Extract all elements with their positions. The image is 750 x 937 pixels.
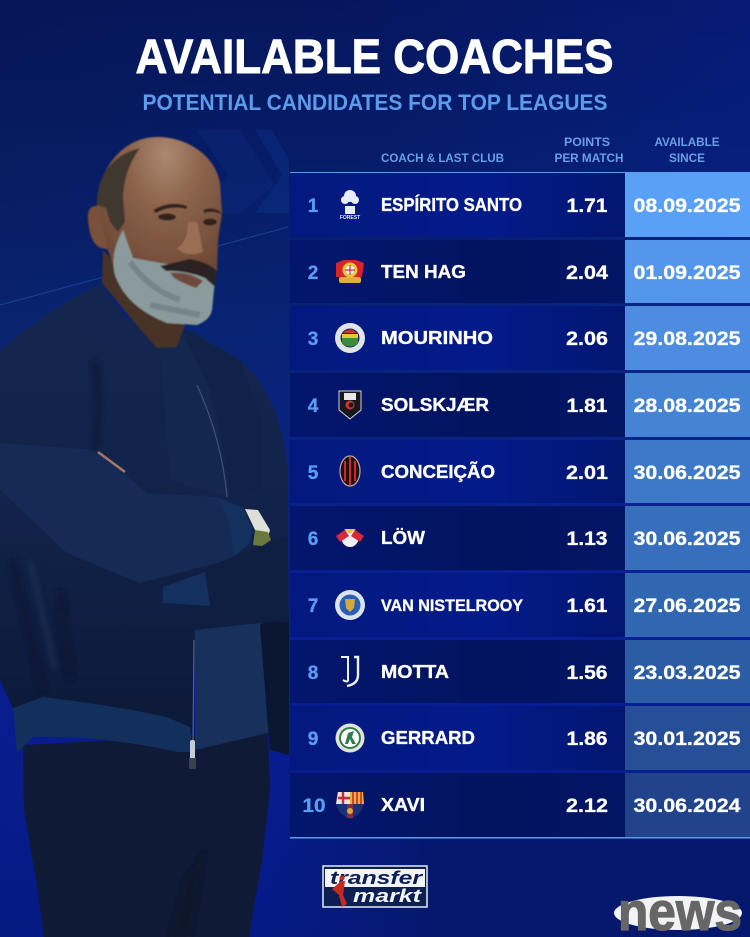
jacket collar [77, 283, 160, 352]
row 4: 28.08.2025 [634, 396, 741, 417]
row 7: 7 [308, 596, 318, 617]
head [97, 137, 222, 315]
row 9: 9 [308, 729, 318, 750]
row 8: MOTTA [381, 662, 449, 682]
folds [12, 360, 98, 690]
row 10: 2.12 [566, 796, 608, 817]
eyebrows [153, 204, 187, 213]
beard [113, 230, 216, 325]
beard shadow [130, 262, 200, 315]
inner t-shirt [160, 335, 230, 497]
icon: Nottingham Forest crest [340, 190, 360, 221]
row 6: LÖW [381, 528, 425, 548]
row 4 [290, 373, 750, 437]
moustache [160, 259, 217, 287]
title: AVAILABLE COACHES [136, 31, 614, 84]
icon: FC Barcelona crest [336, 792, 364, 819]
row 7: 1.61 [566, 596, 608, 617]
nose [177, 222, 203, 254]
row 2: TEN HAG [381, 262, 466, 282]
neck [102, 250, 185, 348]
row 8: 8 [308, 663, 318, 684]
hem band [13, 697, 192, 753]
row 3 [290, 306, 750, 370]
jacket body [0, 284, 289, 735]
eyes [158, 214, 176, 220]
row 6: 1.13 [566, 529, 608, 550]
lower crossed sleeve [163, 537, 288, 623]
right jacket flap [260, 610, 289, 755]
row 2: 2.04 [566, 263, 608, 284]
row 5: CONCEIÇÃO [381, 461, 495, 482]
mouth [170, 273, 203, 288]
table headers: PER MATCH [554, 151, 624, 165]
hand [98, 452, 125, 472]
row 9: 1.86 [566, 729, 608, 750]
row 5: 5 [308, 463, 319, 484]
subtitle: POTENTIAL CANDIDATES FOR TOP LEAGUES [142, 90, 608, 115]
right lapel [182, 328, 262, 497]
zip pull [190, 740, 195, 760]
row 9: GERRARD [381, 728, 475, 748]
row 3: MOURINHO [381, 328, 493, 348]
icon: AC Milan crest [340, 456, 360, 486]
row 1: ESPÍRITO SANTO [381, 194, 522, 215]
row 4: 1.81 [566, 396, 608, 417]
watch [245, 509, 270, 537]
row 2: 01.09.2025 [634, 263, 741, 284]
row 10: 30.06.2024 [634, 796, 741, 817]
row 4: 4 [308, 396, 319, 417]
logo: Transfermarkt: markt [353, 886, 422, 906]
hair stubble [97, 148, 140, 232]
row 2 [290, 240, 750, 303]
row 1: 1 [308, 196, 319, 217]
row 8: 1.56 [566, 663, 608, 684]
icon: Juventus crest [341, 657, 358, 686]
icon: Leicester City crest [335, 590, 365, 620]
row 2: 2 [308, 263, 318, 284]
head group [88, 137, 222, 348]
header: coach and last club: COACH & LAST CLUB [381, 151, 504, 165]
row 8: 23.03.2025 [634, 663, 741, 684]
row 6: 6 [308, 529, 318, 550]
icon: Al-Ettifaq crest [336, 724, 364, 752]
photo: coach standing with crossed arms [0, 137, 289, 937]
row 4: SOLSKJÆR [381, 395, 489, 415]
row 3: 29.08.2025 [634, 329, 741, 350]
row 9 [290, 706, 750, 770]
row 6 [290, 506, 750, 570]
header: points per match: POINTS [564, 135, 610, 149]
upper crossed sleeve [0, 443, 253, 583]
row 6: 30.06.2025 [634, 529, 741, 550]
icon: Bayer Leverkusen crest [336, 260, 364, 283]
row 7 [290, 573, 750, 637]
icon: RB Leipzig crest [336, 529, 364, 547]
row 5: 30.06.2025 [634, 463, 741, 484]
row 1: 1.71 [566, 196, 608, 217]
row 7: VAN NISTELROOY [381, 596, 524, 615]
table headers: SINCE [669, 151, 705, 165]
icon: Fenerbahce crest [335, 323, 365, 353]
row 3: 3 [308, 329, 318, 350]
trousers [23, 732, 270, 937]
row 1: 08.09.2025 [634, 196, 741, 217]
t-shirt hem [195, 620, 268, 750]
row 8 [290, 640, 750, 703]
icon: Besiktas crest [339, 391, 361, 419]
icon: Nottingham Forest crest: FOREST [340, 215, 360, 221]
row 10 [290, 773, 750, 837]
sleeve cuff [217, 497, 253, 557]
table headers [381, 135, 720, 165]
row 9: 30.01.2025 [634, 729, 741, 750]
row 5: 2.01 [566, 463, 608, 484]
row 10: 10 [302, 796, 326, 817]
ear [88, 206, 112, 250]
row 5 [290, 440, 750, 503]
row 3: 2.06 [566, 329, 608, 350]
row 1 [290, 173, 750, 237]
header: available since: AVAILABLE [654, 135, 720, 149]
row 10: XAVI [381, 795, 425, 815]
row 7: 27.06.2025 [634, 596, 741, 617]
logo: Transfermarkt [323, 866, 427, 907]
logo: Transfermarkt: transfer [330, 868, 423, 888]
zipper line [197, 385, 227, 497]
